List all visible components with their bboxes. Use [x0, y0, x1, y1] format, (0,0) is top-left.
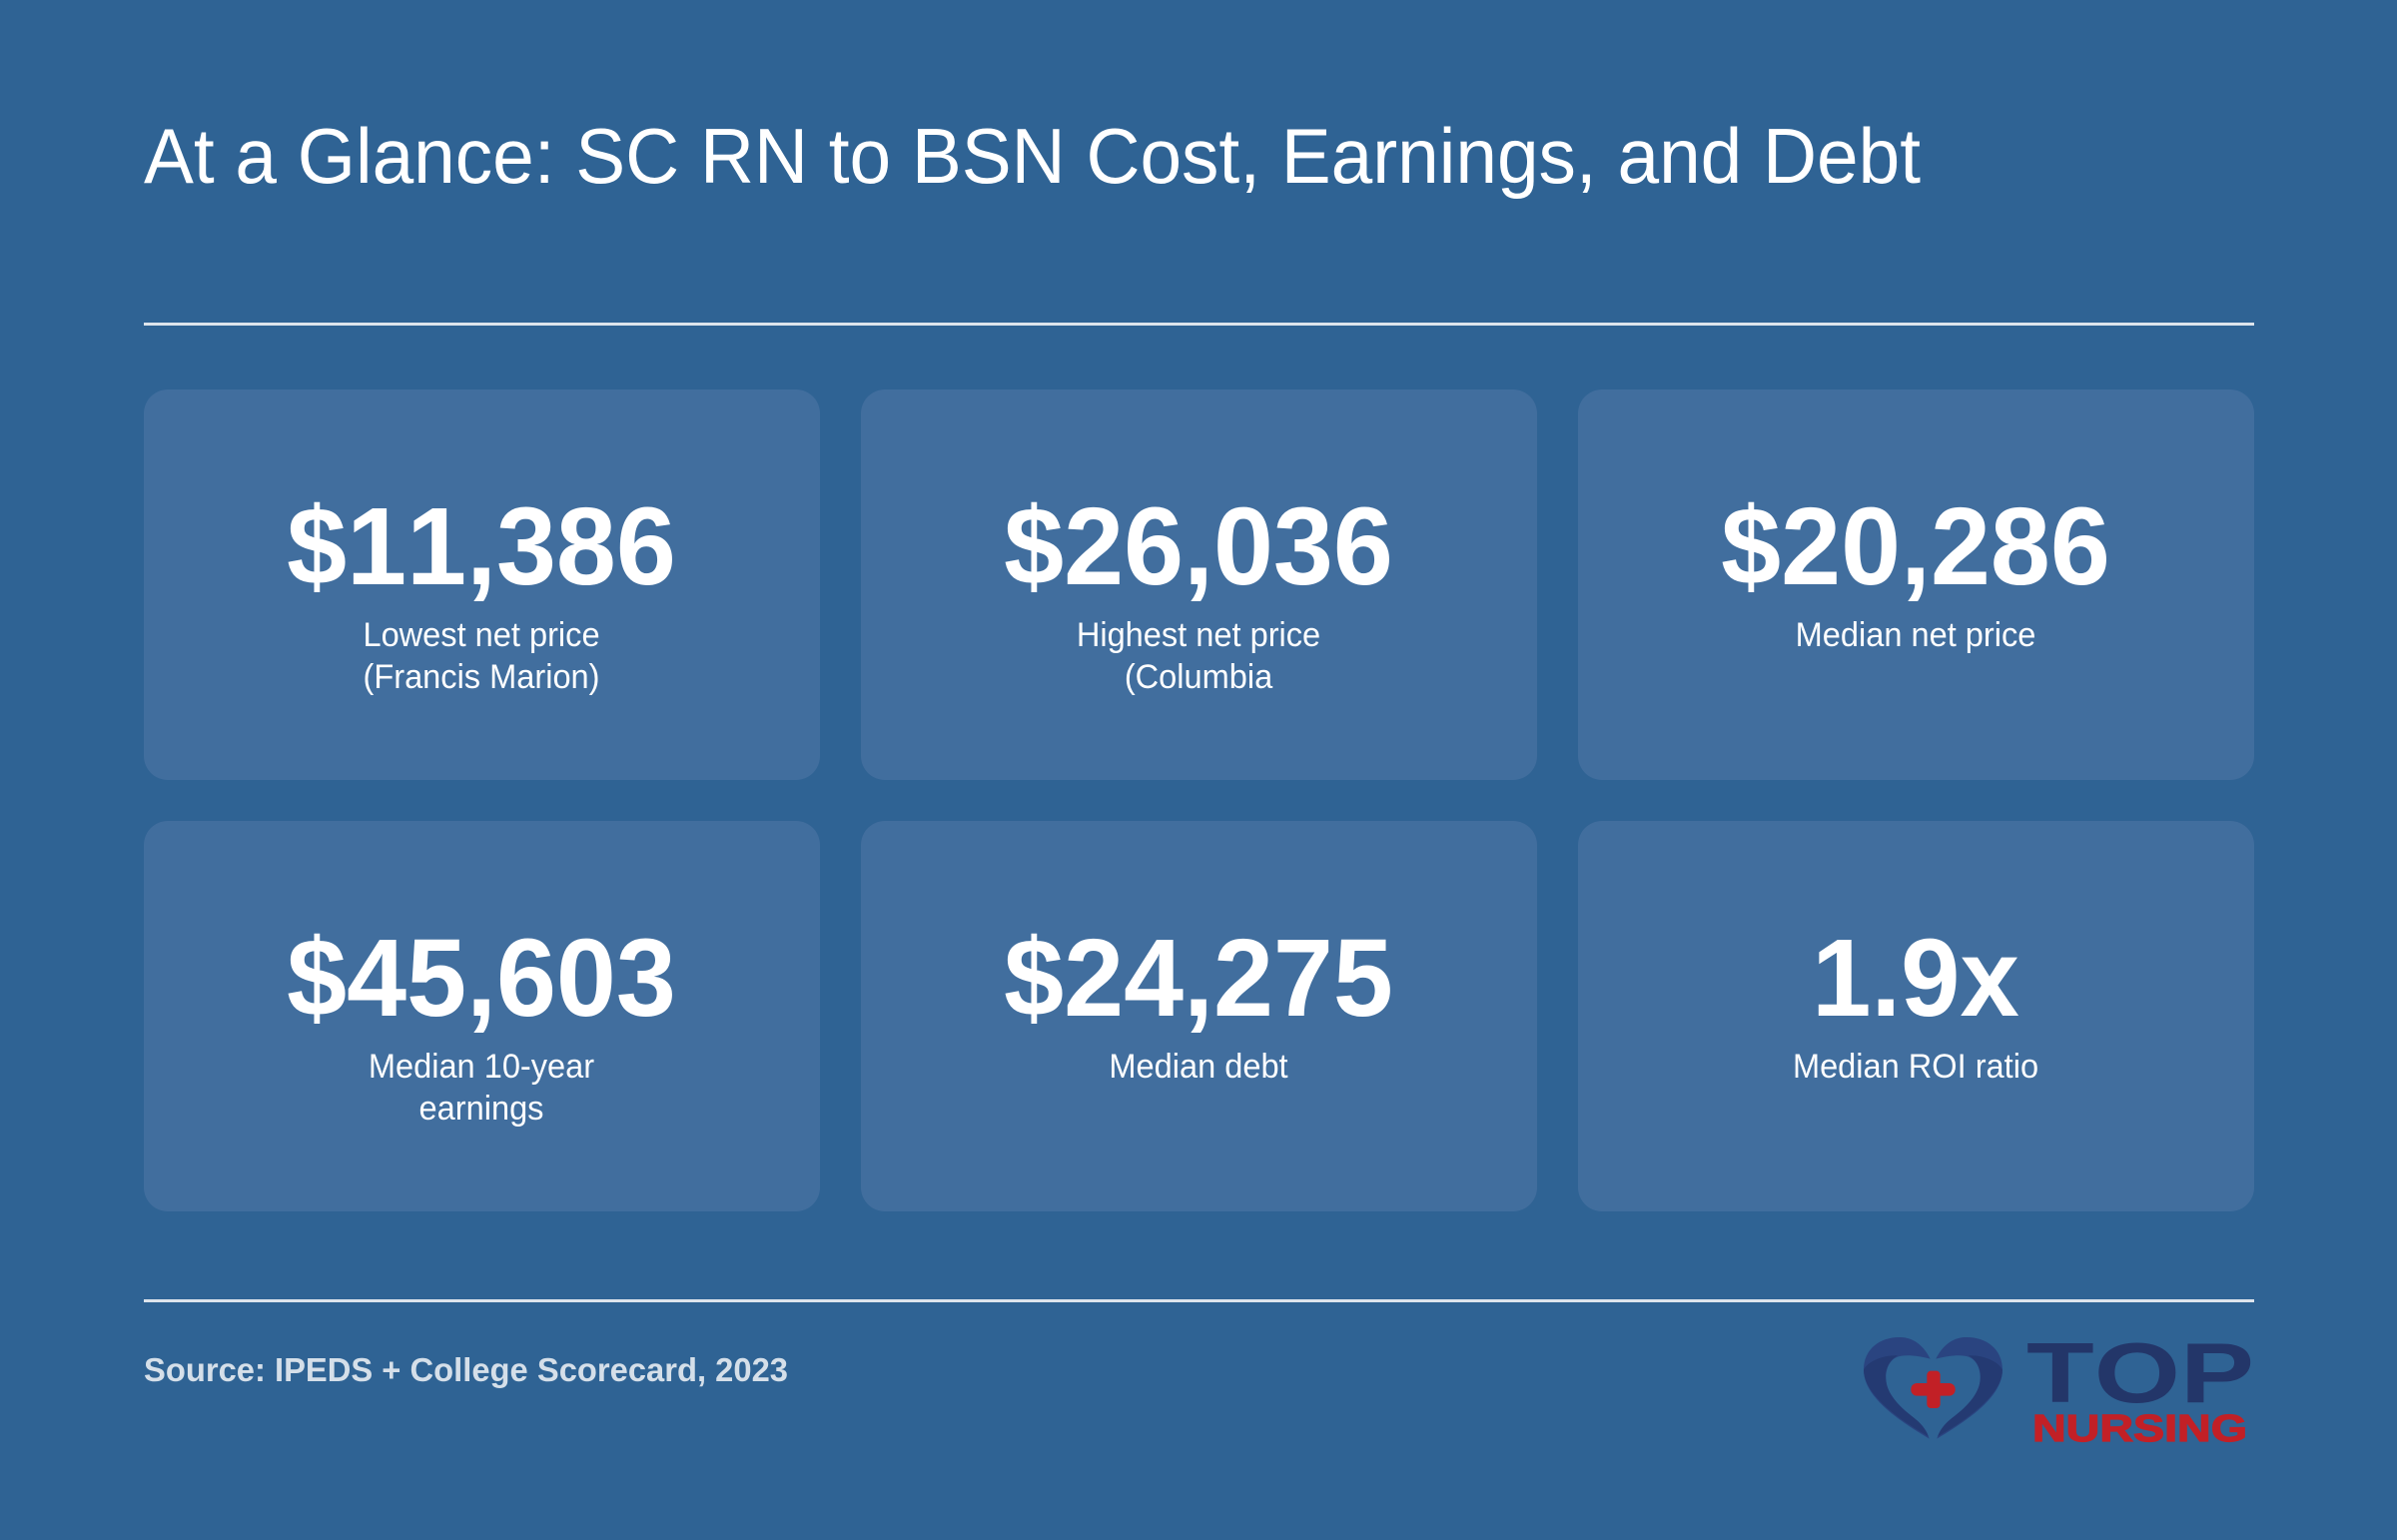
panel: median 10-year earnings [144, 821, 820, 1211]
title: At a Glance: SC RN to BSN Cost, Earnings, and Debt [144, 112, 1921, 200]
label: highest net price: (Columbia [1125, 658, 1273, 696]
label: median earnings: Median 10-year [369, 1048, 594, 1086]
label: highest net price [1077, 616, 1320, 696]
icon: heart with cross [1864, 1337, 2002, 1439]
panel: lowest net price [144, 389, 820, 780]
label: median earnings [369, 1048, 594, 1128]
label: lowest net price [363, 616, 600, 696]
label: median ROI: Median ROI ratio [1793, 1048, 2038, 1086]
logo: Top Nursing [1864, 1326, 2254, 1450]
source note: Source: IPEDS + College Scorecard, 2023 [144, 1351, 788, 1388]
label: highest net price: Highest net price [1077, 616, 1320, 654]
value: lowest net price: $11,386 [287, 485, 676, 608]
value: median debt: $24,275 [1004, 917, 1393, 1040]
value: median net price: $20,286 [1721, 485, 2110, 608]
panel: median debt [861, 821, 1537, 1211]
label: median debt: Median debt [1109, 1048, 1288, 1086]
label: median earnings: earnings [419, 1090, 543, 1128]
value: highest net price: $26,036 [1004, 485, 1393, 608]
value: median ROI: 1.9x [1812, 917, 2019, 1039]
panel: highest net price [861, 389, 1537, 780]
value: median earnings: $45,603 [287, 917, 676, 1040]
panel: median net price [1578, 389, 2254, 780]
label: median net price: Median net price [1796, 616, 2035, 654]
logo wordmark: TOP: TOP [2026, 1326, 2254, 1421]
label: lowest net price: Lowest net price [363, 616, 600, 654]
panel: median ROI ratio [1578, 821, 2254, 1211]
label: lowest net price: (Francis Marion) [364, 658, 599, 696]
logo wordmark: NURSING: NURSING [2032, 1408, 2247, 1450]
